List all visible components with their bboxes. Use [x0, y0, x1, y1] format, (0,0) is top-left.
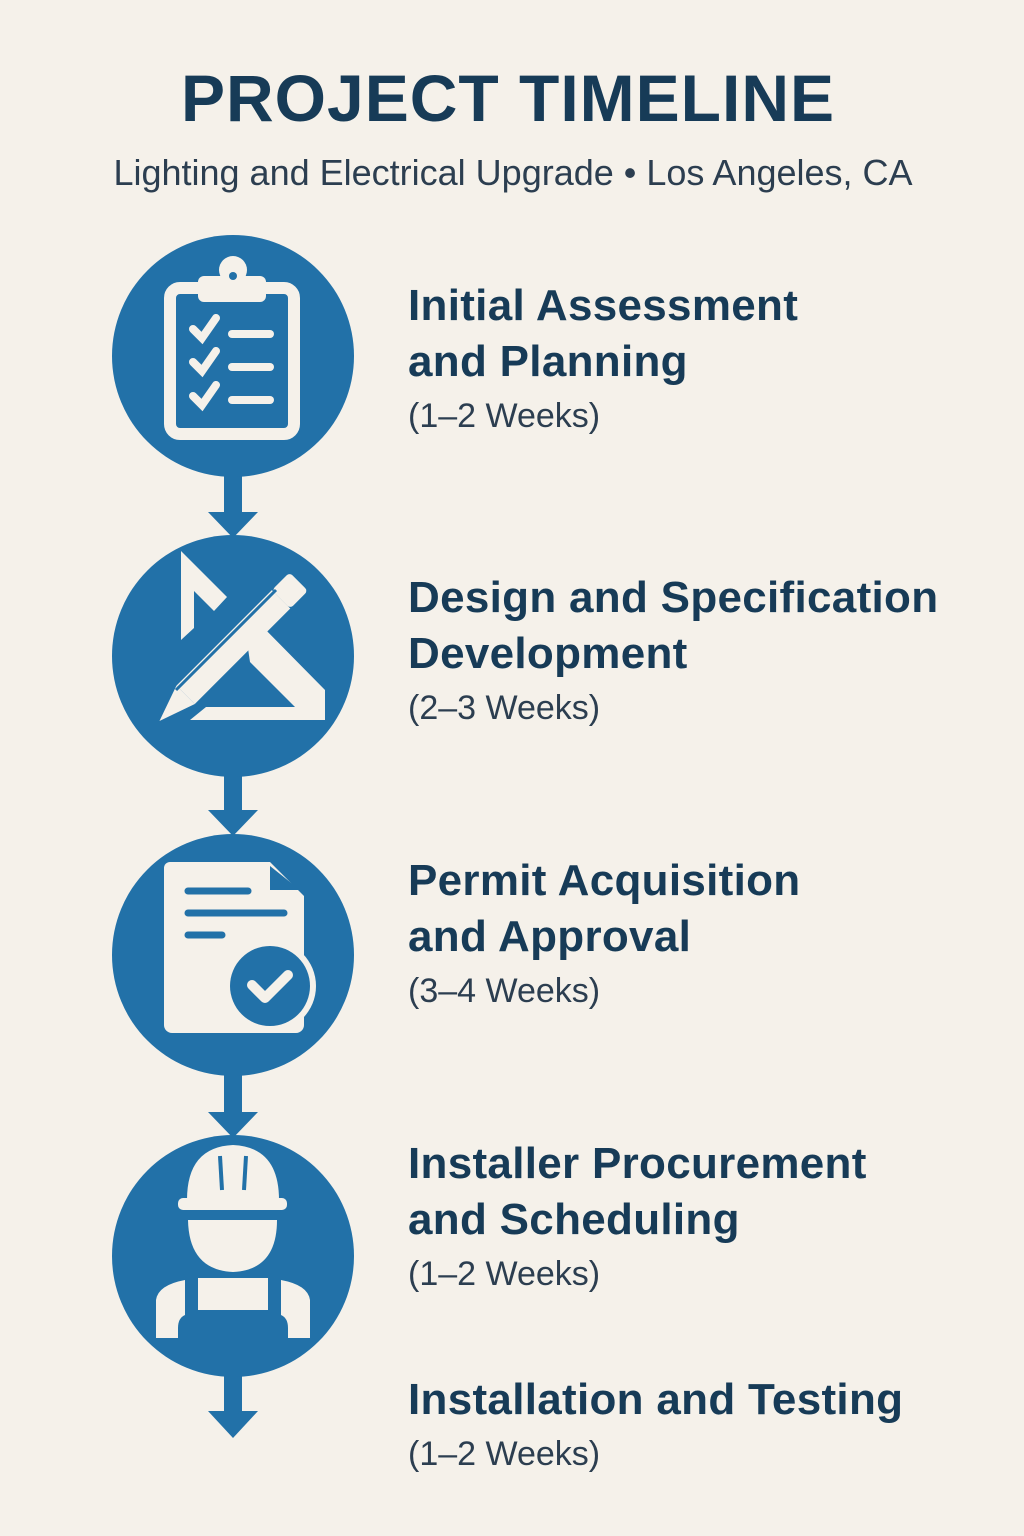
icon: document with check: [112, 834, 354, 1076]
step 4 text: [408, 1139, 867, 1293]
step 1 text: and Planning: [408, 337, 688, 386]
step 3 text: [408, 856, 800, 1010]
step 3 text: and Approval: [408, 912, 691, 961]
arrow 3: [208, 1070, 258, 1138]
step 1 text: (1–2 Weeks): [408, 397, 600, 435]
step 2 text: (2–3 Weeks): [408, 689, 600, 727]
step 4 text: and Scheduling: [408, 1195, 740, 1244]
step 4 text: Installer Procurement: [408, 1139, 867, 1188]
step 3 text: Permit Acquisition: [408, 856, 800, 905]
title: PROJECT TIMELINE: [181, 61, 835, 135]
arrow 1: [208, 470, 258, 538]
step 4 text: (1–2 Weeks): [408, 1255, 600, 1293]
arrow 2: [208, 770, 258, 836]
step 3 text: (3–4 Weeks): [408, 972, 600, 1010]
step 5 text: (1–2 Weeks): [408, 1435, 600, 1473]
step 2 text: Development: [408, 629, 688, 678]
icon: worker: [112, 1135, 354, 1377]
arrow 4: [208, 1370, 258, 1438]
icon: pencil and triangle: [112, 535, 354, 777]
step 1 text: [408, 281, 798, 435]
step 5 text: [408, 1375, 903, 1473]
step 1 text: Initial Assessment: [408, 281, 798, 330]
step 5 text: Installation and Testing: [408, 1375, 903, 1424]
icon: clipboard: [112, 235, 354, 477]
subtitle: Lighting and Electrical Upgrade • Los Angeles, CA: [113, 152, 913, 193]
step 2 text: [408, 573, 938, 727]
step 2 text: Design and Specification: [408, 573, 938, 622]
